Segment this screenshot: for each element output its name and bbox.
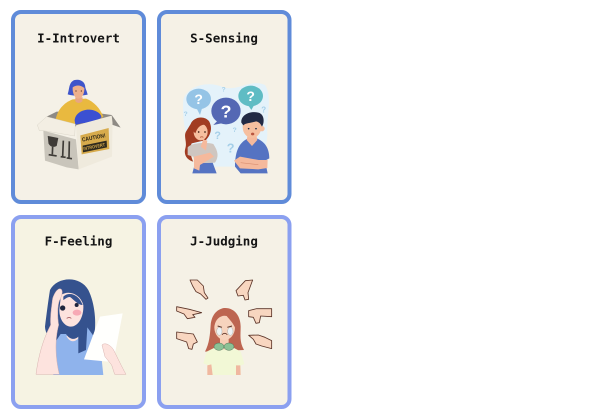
small question marks: ? [227,142,235,156]
label: caution sticker: INTROVERT [83,142,106,151]
panel: F-Feeling card [13,217,144,407]
label: caution sticker: CAUTION! [82,133,106,144]
bubble: dark blue question: ? [220,101,231,121]
small question marks: ? [184,111,188,118]
illustration: person sitting in a caution box [37,80,121,169]
panel: I-Introvert card [13,12,144,202]
heading: F-Feeling: F-Feeling [45,234,112,248]
figure: man with crossed arms [234,112,269,173]
panel: S-Sensing card [159,12,290,202]
icon: fragile glass and arrows [49,137,72,159]
small question marks: ? [222,86,226,93]
heading: S-Sensing: S-Sensing [190,30,258,46]
small question marks: ? [214,130,221,142]
figure: girl [203,308,244,375]
illustration: crying girl surrounded by pointing hands [177,280,272,375]
small question marks [184,86,266,156]
illustration: two people with question bubbles [183,83,269,173]
small question marks: ? [261,106,266,115]
panel: J-Judging card [159,217,290,407]
label: caution sticker [80,128,109,154]
illustration: worried woman reading paper [36,279,126,375]
small question marks: ? [233,127,237,134]
pointing hands [177,280,272,349]
heading: J-Judging: J-Judging [190,234,258,248]
heading: I-Introvert: I-Introvert [37,30,120,46]
bubble: teal question: ? [246,88,255,104]
bubble: light blue question: ? [194,91,203,107]
figure: woman thinking [185,117,218,173]
